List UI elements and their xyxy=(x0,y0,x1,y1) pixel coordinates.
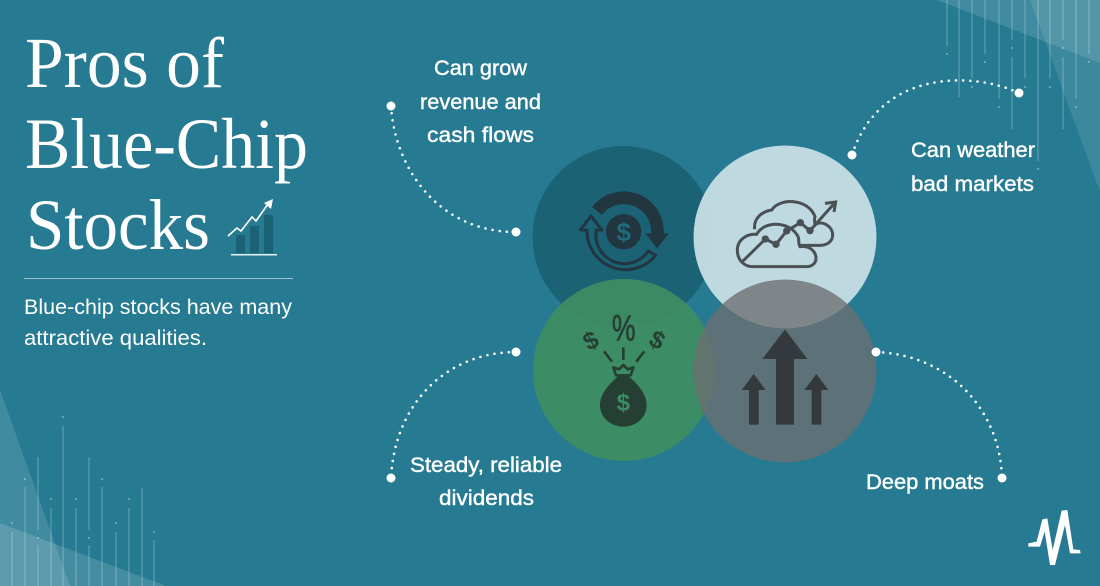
label: can grow revenue and cash flows xyxy=(420,57,541,147)
decorative top-right chart pattern xyxy=(937,0,1100,192)
title: Blue-Chip xyxy=(25,104,308,184)
label: steady reliable dividends xyxy=(410,454,562,510)
intro text xyxy=(24,296,292,350)
icon: three up arrows xyxy=(742,329,828,425)
label: can weather bad markets xyxy=(911,139,1035,196)
logo xyxy=(1028,510,1081,565)
divider rule xyxy=(24,278,293,280)
label: can grow revenue and cash flows: revenue and xyxy=(420,91,541,114)
label: can grow revenue and cash flows: Can grow xyxy=(434,57,528,80)
label: can weather bad markets: Can weather xyxy=(911,139,1035,162)
icon: money bag with percent and dollars: $ xyxy=(644,326,669,356)
connector: revenue xyxy=(386,102,520,236)
title xyxy=(25,23,308,265)
icon: circular dollar arrows xyxy=(580,198,669,270)
label: can weather bad markets: bad markets xyxy=(911,173,1034,196)
label: steady reliable dividends: Steady, reliable xyxy=(410,454,562,477)
icon: money bag with percent and dollars: $ xyxy=(579,326,604,357)
circle: deep moats xyxy=(694,280,876,462)
icon: clouds with rising trend line xyxy=(737,202,836,267)
icon: money bag with percent and dollars: % xyxy=(612,308,636,349)
decorative bottom-left chart pattern xyxy=(0,390,166,586)
title: Stocks xyxy=(26,185,210,265)
circle: weather bad markets xyxy=(694,146,876,328)
icon: money bag with percent and dollars: $ xyxy=(617,390,630,417)
icon: circular dollar arrows: $ xyxy=(616,217,631,247)
icon: rising bar chart xyxy=(228,199,277,255)
icon: money bag with percent and dollars xyxy=(579,308,669,427)
title: Pros of xyxy=(25,23,224,103)
circle: revenue and cash flows xyxy=(532,146,714,328)
connector: dividends xyxy=(386,348,520,482)
connector: bad markets xyxy=(848,80,1024,160)
intro text: Blue-chip stocks have many xyxy=(24,296,292,319)
label: steady reliable dividends: dividends xyxy=(439,487,534,510)
label: can grow revenue and cash flows: cash flows xyxy=(427,124,534,147)
label: deep moats: Deep moats xyxy=(866,471,984,494)
circle: dividends xyxy=(533,279,715,461)
connector: deep moats xyxy=(872,348,1006,482)
intro text: attractive qualities. xyxy=(24,327,207,350)
